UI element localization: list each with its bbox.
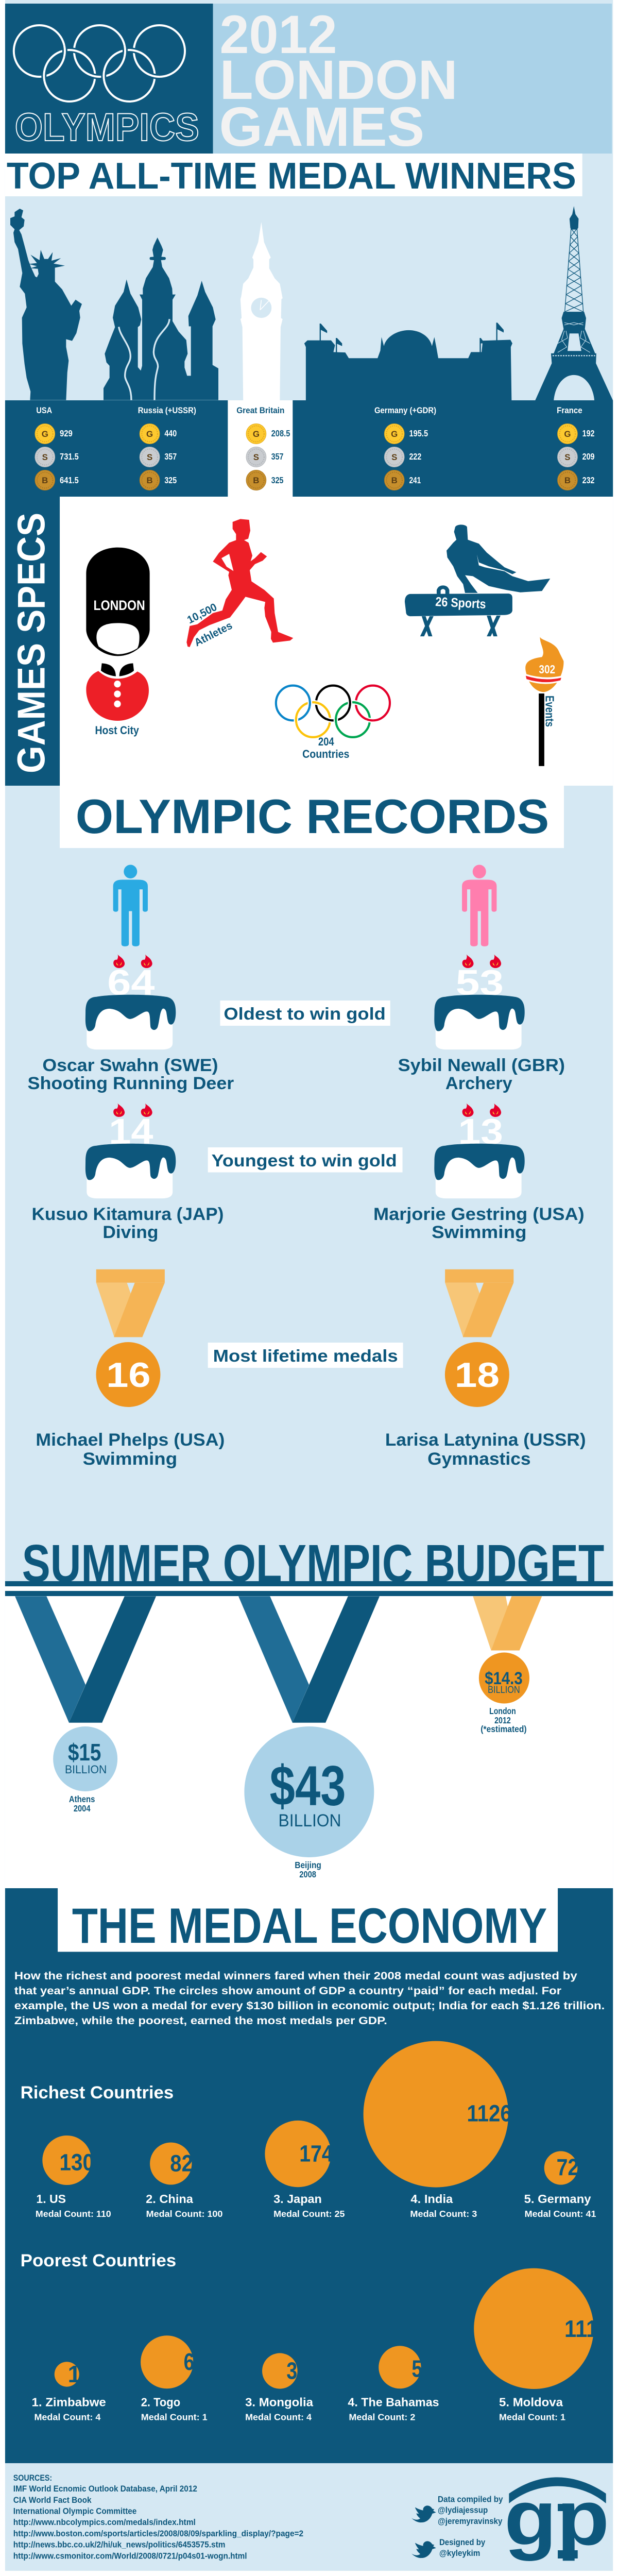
bubble: Germany xyxy=(524,2151,596,2219)
bubble: China xyxy=(146,2142,222,2219)
year: 2004 xyxy=(74,1803,91,1814)
sources block: IMF World Ecnomic Outlook Database, April 2012 xyxy=(13,2484,197,2494)
unit: BILLION xyxy=(279,1811,341,1831)
country: France: G xyxy=(564,429,571,439)
name: Michael Phelps (USA) xyxy=(36,1430,225,1450)
bubble: Moldova: 111 xyxy=(564,2316,598,2342)
ribbon xyxy=(15,1596,156,1723)
sources block xyxy=(13,2473,303,2561)
bubble: Mongolia: 3. Mongolia xyxy=(245,2396,313,2409)
medal counts: 208.5 xyxy=(271,428,290,438)
bubble: Moldova: 5. Moldova xyxy=(499,2396,563,2409)
label: most lifetime medals: Most lifetime medals xyxy=(213,1346,398,1365)
OLYMPICS outline wordmark: OLYMPICS xyxy=(15,106,199,149)
amount: $43 xyxy=(270,1755,346,1818)
heading: games specs: GAMES SPECS xyxy=(10,513,53,773)
panel: games specs xyxy=(5,497,613,786)
medal counts: 209 xyxy=(582,451,595,462)
bubble: China: 82 xyxy=(170,2151,193,2177)
country: France xyxy=(557,405,595,490)
label: youngest to win gold xyxy=(208,1147,403,1173)
medal counts: 357 xyxy=(164,451,177,462)
Athletes label: Athletes xyxy=(193,620,234,649)
sport: Swimming xyxy=(83,1449,177,1469)
label: Germany (+GDR) xyxy=(374,405,436,415)
age 53: 53 xyxy=(456,962,504,1003)
panel: header logo xyxy=(5,4,213,154)
silver medal xyxy=(140,447,160,467)
medal disc xyxy=(445,1342,509,1407)
medal: beijing xyxy=(238,1596,380,1879)
record: larisa latynina xyxy=(385,1269,586,1469)
icon: cake xyxy=(85,1144,176,1198)
medal count 16: 16 xyxy=(106,1356,151,1395)
bubble: China: 2. China xyxy=(146,2192,193,2206)
country: Germany: S xyxy=(391,452,397,462)
record: oldest man xyxy=(28,865,234,1093)
bubble: Germany: Medal Count: 41 xyxy=(525,2209,596,2219)
icon: white olympic rings xyxy=(14,25,185,101)
medal disc xyxy=(96,1342,160,1407)
title line LONDON: LONDON xyxy=(219,49,458,111)
sport: Archery xyxy=(445,1074,512,1093)
country: Germany: B xyxy=(391,476,398,485)
record: oldest woman xyxy=(398,865,565,1093)
country: Russia: B xyxy=(147,476,153,485)
country: Great Britain: G xyxy=(253,429,260,439)
icon: royal guard host city xyxy=(86,548,150,737)
country: Great Britain xyxy=(236,405,290,490)
medal counts: 357 xyxy=(271,451,283,462)
country: Russia: S xyxy=(147,452,152,462)
icon: medal ribbon xyxy=(445,1269,513,1337)
country: USA: G xyxy=(42,429,48,439)
bubble: The Bahamas: 5 xyxy=(411,2355,422,2382)
medal counts: 731.5 xyxy=(60,451,79,462)
medal counts: 325 xyxy=(164,475,177,485)
country: Great Britain: B xyxy=(253,476,259,485)
bubble: Germany: 72 xyxy=(557,2155,579,2180)
year: 2012 xyxy=(494,1715,511,1725)
medal: london xyxy=(473,1596,542,1734)
silver medal xyxy=(35,447,55,467)
credits: data compiled by: @lydiajessup xyxy=(438,2505,488,2515)
name: Kusuo Kitamura (JAP) xyxy=(31,1205,224,1224)
302 label: 302 xyxy=(539,663,555,676)
icon: blue person xyxy=(113,865,148,946)
title line 2012: 2012 xyxy=(219,5,337,65)
sources block: http://www.csmonitor.com/World/2008/0721/p04s01-wogn.html xyxy=(13,2551,247,2561)
disc xyxy=(479,1653,529,1703)
year: 2008 xyxy=(299,1869,316,1879)
age 64: 64 xyxy=(107,962,155,1003)
name: Marjorie Gestring (USA) xyxy=(373,1205,585,1224)
label: youngest to win gold: Youngest to win gold xyxy=(212,1151,397,1170)
medal counts: 325 xyxy=(271,475,283,485)
gold medal xyxy=(384,423,404,444)
medal counts: 192 xyxy=(582,428,595,438)
gold medal xyxy=(246,423,266,444)
credits: designed by: Designed by xyxy=(439,2537,486,2547)
label: Russia (+USSR) xyxy=(138,405,196,415)
bubble: Zimbabwe: 1. Zimbabwe xyxy=(31,2396,106,2409)
country: Russia xyxy=(138,405,196,490)
name: Larisa Latynina (USSR) xyxy=(385,1430,586,1450)
bubble: India xyxy=(364,2041,512,2219)
label: most lifetime medals xyxy=(208,1343,403,1368)
heading: olympic records: OLYMPIC RECORDS xyxy=(76,789,549,843)
icon: big ben xyxy=(241,222,283,400)
bubble: China: Medal Count: 100 xyxy=(146,2209,222,2219)
bubble: Zimbabwe xyxy=(31,2361,106,2422)
gold medal xyxy=(35,423,55,444)
intro paragraph: How the richest and poorest medal winners fared when their 2008 medal count was adjusted by xyxy=(14,1970,577,1982)
credits: data compiled by: @jeremyravinsky xyxy=(438,2516,503,2526)
birthday candle flames xyxy=(113,954,152,968)
estimate note: (*estimated) xyxy=(480,1724,527,1734)
bubble: Mongolia: 3 xyxy=(286,2358,297,2384)
country: USA: S xyxy=(42,452,48,462)
credits: data compiled by: Data compiled by xyxy=(438,2494,503,2504)
amount: $14.3 xyxy=(485,1669,523,1688)
credits: data compiled by xyxy=(411,2494,503,2526)
intro paragraph: Zimbabwe, while the poorest, earned the most medals per GDP. xyxy=(14,2014,387,2027)
bubble: India: 4. India xyxy=(410,2192,453,2206)
label: USA xyxy=(36,405,52,415)
bubble: US: 130 xyxy=(60,2149,94,2176)
disc xyxy=(53,1726,117,1791)
bronze medal xyxy=(35,470,55,490)
subheading: poorest countries: Poorest Countries xyxy=(21,2251,176,2270)
amount: $15 xyxy=(68,1739,101,1766)
icon: eiffel tower xyxy=(535,206,613,400)
bubble: India: 1126 xyxy=(467,2100,512,2126)
country: USA xyxy=(35,405,79,490)
bubble: Germany: 5. Germany xyxy=(524,2192,591,2206)
medal counts xyxy=(582,428,595,485)
birthday candle flames xyxy=(462,954,501,968)
birthday candle flames xyxy=(113,1103,152,1117)
country: Germany xyxy=(374,405,436,490)
logo: gp: gp xyxy=(504,2474,609,2561)
medal: athens xyxy=(15,1596,156,1814)
icon: russian onion domes xyxy=(104,238,218,400)
Countries label: Countries xyxy=(302,748,349,760)
medal counts: 641.5 xyxy=(60,475,79,485)
bubble: Moldova xyxy=(474,2268,598,2422)
bubble: US xyxy=(36,2136,111,2219)
bubble: Togo: 6 xyxy=(184,2349,194,2375)
bubble: Japan xyxy=(265,2121,345,2219)
LONDON label: LONDON xyxy=(94,598,145,613)
panel: title xyxy=(213,4,612,158)
medal counts xyxy=(60,428,79,485)
country: Germany: G xyxy=(391,429,398,439)
age 13: 13 xyxy=(458,1111,503,1151)
icon: medal ribbon xyxy=(96,1269,165,1337)
sport: Swimming xyxy=(432,1223,527,1242)
sport: Shooting Running Deer xyxy=(28,1074,234,1093)
sources block: SOURCES: xyxy=(13,2473,52,2483)
medal counts: 929 xyxy=(60,428,73,438)
Host City label: Host City xyxy=(95,724,139,737)
city: Athens xyxy=(69,1794,95,1804)
name: Oscar Swahn (SWE) xyxy=(42,1056,218,1075)
name: Sybil Newall (GBR) xyxy=(398,1056,565,1075)
icon: runner athletes xyxy=(185,519,293,649)
bubble: The Bahamas: 4. The Bahamas xyxy=(348,2396,439,2409)
label: Great Britain xyxy=(236,405,284,415)
icon: twitter bird xyxy=(411,2505,436,2522)
10,500 label: 10,500 xyxy=(185,601,219,626)
icon: gymnast on pommel horse xyxy=(405,524,550,636)
ribbon xyxy=(238,1596,380,1723)
icon: twitter bird xyxy=(411,2541,436,2558)
bubble: Japan: Medal Count: 25 xyxy=(273,2209,345,2219)
bubble: Togo xyxy=(141,2335,208,2422)
label: oldest to win gold xyxy=(220,1001,390,1026)
icon: reichstag xyxy=(304,323,512,400)
intro paragraph: that year’s annual GDP. The circles show amount of GDP a country “paid” for each medal. For xyxy=(14,1985,561,1997)
icon: cake xyxy=(434,995,525,1049)
bubble: Mongolia: Medal Count: 4 xyxy=(245,2412,312,2422)
title line GAMES: GAMES xyxy=(219,96,424,158)
label: France xyxy=(557,405,582,415)
Events label: Events xyxy=(543,696,556,727)
bubble: Japan: 3. Japan xyxy=(273,2192,322,2206)
bubble: Moldova: Medal Count: 1 xyxy=(499,2412,565,2422)
panel: medal economy xyxy=(5,1888,613,2463)
country: Russia: G xyxy=(146,429,153,439)
label: oldest to win gold: Oldest to win gold xyxy=(224,1004,386,1023)
bronze medal xyxy=(140,470,160,490)
panel: medal table background xyxy=(5,400,613,497)
medal count 18: 18 xyxy=(455,1356,500,1395)
age 14: 14 xyxy=(109,1111,153,1151)
sport: Diving xyxy=(102,1223,158,1242)
bubble: US: 1. US xyxy=(36,2192,66,2206)
panel: budget xyxy=(5,1581,613,1888)
bronze medal xyxy=(558,470,577,490)
bronze medal xyxy=(384,470,404,490)
medal counts xyxy=(271,428,290,485)
silver medal xyxy=(558,447,577,467)
intro paragraph: example, the US won a medal for every $130 billion in economic output; India for each $1.126 trillion. xyxy=(14,1999,605,2012)
medal counts: 195.5 xyxy=(409,428,428,438)
icon: olympic torch xyxy=(525,637,563,766)
record: michael phelps xyxy=(36,1269,225,1469)
subheading: richest countries: Richest Countries xyxy=(21,2083,174,2103)
medal counts: 232 xyxy=(582,475,595,485)
bubble: Togo: 2. Togo xyxy=(141,2396,180,2409)
bubble: The Bahamas: Medal Count: 2 xyxy=(349,2412,415,2422)
medal counts xyxy=(409,428,428,485)
silver medal xyxy=(384,447,404,467)
icon: cake xyxy=(85,995,176,1049)
country: USA: B xyxy=(42,476,48,485)
sources block: http://www.nbcolympics.com/medals/index.html xyxy=(13,2517,196,2527)
credits: designed by xyxy=(411,2537,486,2558)
city: London xyxy=(489,1706,516,1716)
medal counts: 222 xyxy=(409,451,421,462)
unit: BILLION xyxy=(488,1685,520,1696)
sources block: http://www.boston.com/sports/articles/2008/08/09/sparkling_display/?page=2 xyxy=(13,2529,303,2538)
bubble: Togo: Medal Count: 1 xyxy=(141,2412,208,2422)
icon: pink person xyxy=(462,865,496,946)
sources block: http://news.bbc.co.uk/2/hi/uk_news/politics/6453575.stm xyxy=(13,2540,225,2550)
bubble: Zimbabwe: 1 xyxy=(68,2361,81,2387)
silver medal xyxy=(246,447,266,467)
bubble: Zimbabwe: Medal Count: 4 xyxy=(34,2412,100,2422)
record: youngest girl xyxy=(373,1103,585,1242)
medal counts: 440 xyxy=(164,428,177,438)
icon: coloured olympic rings xyxy=(276,686,390,760)
bubble: US: Medal Count: 110 xyxy=(36,2209,111,2219)
city: Beijing xyxy=(295,1860,321,1870)
disc xyxy=(244,1726,374,1857)
intro paragraph xyxy=(14,1970,605,2027)
unit: BILLION xyxy=(65,1763,107,1776)
sources block: CIA World Fact Book xyxy=(13,2495,92,2505)
bubble: Japan: 174 xyxy=(299,2141,333,2167)
bubble: The Bahamas xyxy=(348,2346,439,2422)
bubble: Mongolia xyxy=(245,2353,313,2422)
bubble: India: Medal Count: 3 xyxy=(410,2209,477,2219)
sport: Gymnastics xyxy=(427,1449,531,1469)
medal counts xyxy=(164,428,177,485)
icon: cake xyxy=(434,1144,525,1198)
country: France: B xyxy=(564,476,571,485)
sources block: International Olympic Committee xyxy=(13,2506,136,2516)
medal counts: 241 xyxy=(409,475,421,485)
bronze medal xyxy=(246,470,266,490)
gold medal xyxy=(558,423,577,444)
heading: the medal economy: THE MEDAL ECONOMY xyxy=(72,1899,547,1954)
26 Sports label: 26 Sports xyxy=(435,595,486,612)
birthday candle flames xyxy=(462,1103,501,1117)
country: Great Britain: S xyxy=(253,452,259,462)
record: youngest boy xyxy=(31,1103,224,1242)
icon: statue of liberty xyxy=(10,209,82,400)
heading: top all-time medal winners: TOP ALL-TIME MEDAL WINNERS xyxy=(7,156,576,197)
204 label: 204 xyxy=(318,735,334,748)
country: France: S xyxy=(564,452,571,462)
ribbon xyxy=(473,1596,542,1651)
credits: designed by: @kyleykim xyxy=(439,2548,480,2558)
gold medal xyxy=(140,423,160,444)
